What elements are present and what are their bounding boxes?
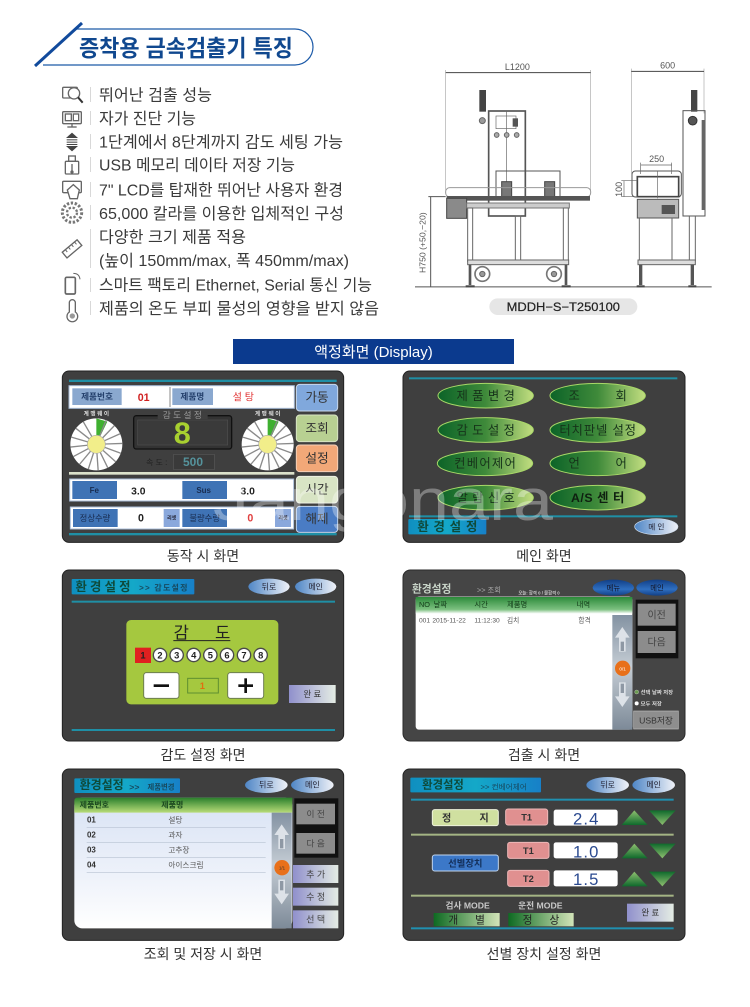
feature text: self diagnosis: 자가 진단 기능 — [99, 110, 196, 128]
log table: 날짜 — [434, 600, 447, 609]
list dividers — [90, 87, 92, 315]
header tag: 환 경 설 정 — [417, 520, 477, 534]
count row: 정상수량 — [80, 513, 111, 523]
caption: sensitivity: 감도 설정 화면 — [160, 747, 246, 763]
caption: main: 메인 화면 — [516, 548, 572, 564]
product table: 04 — [87, 861, 96, 870]
product table: 아이스크림 — [168, 860, 204, 870]
count row: 0 — [138, 513, 144, 525]
menu buttons: A/S 센 터 — [571, 491, 624, 505]
sensitivity card — [126, 620, 278, 704]
sensitivity card: 3 — [174, 650, 179, 660]
technical drawing — [415, 61, 712, 315]
count row: 0 — [247, 513, 253, 525]
sensitivity card: 1 — [140, 651, 146, 661]
mode selectors: 정 상 — [523, 914, 560, 926]
sorter label — [432, 855, 498, 871]
sensitivity card: 1 — [200, 681, 205, 691]
product table: 1/1 — [279, 865, 286, 870]
product table: 설탕 — [168, 815, 182, 825]
sensitivity card: 7 — [241, 650, 247, 660]
feature text: sensitivity: 1단계에서 8단계까지 감도 세팅 가능 — [99, 134, 343, 152]
page buttons: 이 전 — [306, 809, 325, 819]
panel: product list — [62, 769, 344, 940]
nav buttons: 메인 — [305, 780, 320, 790]
product info row — [69, 386, 294, 408]
T2 row: T2 — [523, 874, 534, 884]
icon: USB drive — [65, 156, 79, 174]
log table: 합격 — [578, 615, 591, 624]
side buttons: 조회 — [305, 421, 329, 435]
log table: 11:12:30 — [474, 617, 500, 624]
page buttons: 이전 — [647, 609, 666, 621]
right dial: 계 맹 웨 이 — [255, 410, 280, 418]
stop row: 정 지 — [442, 813, 489, 825]
feature text: LCD: 7" LCD를 탑재한 뛰어난 사용자 환경 — [99, 182, 343, 200]
header tag: 제품변경 — [148, 783, 174, 792]
product table: 03 — [87, 846, 96, 855]
ground line — [415, 285, 712, 288]
section title — [35, 23, 313, 66]
menu buttons: 조 회 — [568, 389, 627, 403]
feature text: detection: 뛰어난 검출 성능 — [99, 86, 212, 104]
model label: MDDH−S−T250100 — [507, 300, 620, 314]
header tag — [74, 778, 180, 793]
log table — [416, 597, 632, 730]
menu buttons: 감 도 설 정 — [456, 423, 515, 437]
count row: 불량수량 — [189, 513, 220, 523]
speed — [146, 454, 214, 470]
speed: 속 도 : — [146, 458, 167, 467]
icon: thermometer — [67, 300, 78, 322]
header tag: 환 경 설 정 — [75, 580, 130, 594]
Fe and Sus row: Fe — [90, 486, 100, 495]
page buttons — [636, 600, 678, 658]
header tag: 환경설정 — [80, 778, 124, 792]
panel: operation screen — [62, 371, 344, 542]
nav buttons — [248, 579, 336, 595]
T2 row: 1.5 — [573, 870, 598, 889]
page buttons — [294, 798, 338, 858]
log table: 2015-11-22 — [432, 617, 466, 624]
icon: smartphone wireless — [65, 273, 80, 294]
done button: 완 료 — [304, 689, 321, 699]
main button — [635, 519, 678, 535]
front view — [417, 62, 591, 287]
feature text: USB: USB 메모리 데이타 저장 기능 — [99, 156, 295, 174]
header tag — [72, 579, 194, 594]
page buttons: 다음 — [647, 637, 666, 649]
side buttons: 가동 — [305, 391, 329, 405]
sensitivity card: 8 — [258, 650, 263, 660]
stop row: T1 — [521, 813, 532, 823]
log table: NO — [419, 600, 430, 609]
Fe and Sus row: 3.0 — [240, 486, 255, 497]
panel: main screen — [403, 371, 685, 542]
nav buttons: 뒤로 — [600, 781, 615, 790]
Fe and Sus row — [70, 479, 294, 501]
mode selectors: 운전 MODE — [518, 900, 563, 911]
nav buttons — [586, 777, 675, 793]
nav buttons: 메인 — [646, 780, 661, 790]
Fe and Sus row: Sus — [196, 486, 212, 495]
panel: inspection log — [403, 570, 685, 741]
count row: 리셋 — [167, 515, 177, 522]
side view: 250 — [649, 154, 664, 164]
speed: 500 — [183, 455, 203, 469]
caption: sorter: 선별 장치 설정 화면 — [487, 946, 601, 962]
USB save button: USB저장 — [639, 716, 673, 726]
action buttons: 추 가 — [306, 869, 325, 879]
front view: H750 (+50,−20) — [417, 212, 427, 273]
menu buttons: 터치판넬 설정 — [559, 423, 636, 437]
done button — [289, 685, 336, 703]
icon: touch screen — [63, 181, 81, 199]
feature text: sizes: 다양한 크기 제품 적용 — [99, 228, 246, 246]
T1 row: T1 — [523, 846, 534, 856]
section title: 증착용 금속검출기 특징 — [79, 35, 293, 61]
Fe and Sus row: 3.0 — [131, 486, 146, 497]
sensitivity card: 2 — [157, 650, 163, 660]
sensitivity card: 감 도 — [174, 624, 230, 643]
mode selectors: 검사 MODE — [446, 900, 490, 911]
sensitivity readout: 감 도 설 정 — [163, 409, 202, 420]
nav buttons: 메뉴 — [607, 583, 620, 592]
screen header: >> 조회 — [477, 585, 501, 594]
side view: 100 — [614, 182, 624, 197]
side buttons: 설정 — [305, 451, 329, 465]
panel: sorter settings — [403, 769, 685, 940]
T1 row: 1.0 — [573, 842, 598, 861]
feature text: ethernet: 스마트 팩토리 Ethernet, Serial 통신 기능 — [99, 276, 372, 294]
right dial — [242, 410, 294, 470]
product table: 제품번호 — [80, 799, 110, 809]
menu buttons: 제 품 변 경 — [456, 389, 515, 403]
left dial: 계 맹 웨 이 — [84, 410, 109, 418]
product info row: 설 탕 — [233, 391, 254, 403]
header tag — [410, 777, 541, 792]
feature text: colors: 65,000 칼라를 이용한 입체적인 구성 — [99, 205, 344, 223]
caption: list: 조회 및 저장 시 화면 — [144, 946, 262, 962]
done button: 완 료 — [642, 908, 659, 918]
icon: magnifier — [63, 87, 83, 103]
left dial — [70, 410, 122, 470]
nav buttons — [593, 580, 678, 596]
side view: 600 — [660, 61, 675, 71]
nav buttons — [245, 777, 334, 793]
menu buttons — [437, 383, 645, 510]
product table: 과자 — [168, 831, 182, 840]
log table: 0/1 — [619, 666, 626, 671]
banner: display — [233, 339, 514, 364]
side buttons — [296, 384, 338, 532]
done button — [627, 904, 674, 922]
stop row — [432, 809, 676, 828]
screen header: 오늘: 합격 0 / 불합격 0 — [518, 590, 560, 597]
menu buttons: 컨베어제어 — [454, 457, 516, 471]
log table: 내역 — [577, 600, 590, 609]
nav buttons: 뒤로 — [259, 781, 274, 790]
sensitivity card: 6 — [224, 650, 230, 660]
log table: 김치 — [507, 615, 519, 624]
caption: operation: 동작 시 화면 — [167, 548, 239, 564]
USB save button — [634, 711, 678, 729]
product info row: 01 — [138, 392, 150, 404]
model label — [489, 298, 637, 315]
icon: color wheel — [62, 203, 82, 222]
side buttons: 해제 — [305, 512, 329, 526]
icon: up down arrows — [66, 133, 78, 151]
log table: 001 — [419, 617, 430, 624]
product table: 01 — [87, 816, 96, 825]
count row — [70, 507, 294, 529]
feature text: temperature: 제품의 온도 부피 물성의 영향을 받지 않음 — [99, 300, 379, 318]
sensitivity readout: 8 — [174, 417, 191, 451]
page buttons: 다 음 — [306, 838, 325, 848]
captions — [144, 548, 601, 962]
screen header — [412, 582, 560, 597]
screen header: 환경설정 — [412, 582, 451, 595]
front view: L1200 — [505, 62, 530, 72]
save options: 모두 저장 — [641, 699, 662, 707]
action buttons: 수 정 — [306, 892, 325, 902]
save options: 선택 날짜 저장 — [641, 688, 673, 696]
stop row: 2.4 — [573, 809, 598, 828]
side view — [614, 61, 705, 286]
sensitivity readout — [134, 409, 232, 451]
header tag: >> — [129, 782, 139, 792]
count row: 리셋 — [278, 515, 288, 522]
nav buttons: 메인 — [308, 581, 323, 591]
main button: 메 인 — [648, 521, 664, 531]
feature icons — [62, 87, 83, 322]
watermark: Jangonara — [213, 468, 554, 533]
panel: sensitivity setting — [62, 570, 344, 741]
feature list — [99, 86, 379, 318]
log table: 제품명 — [507, 600, 527, 609]
action buttons: 선 택 — [306, 915, 325, 925]
product info row: 제품명 — [180, 391, 204, 402]
T1 row — [508, 842, 676, 861]
nav buttons: 메인 — [650, 583, 664, 592]
sensitivity card: 4 — [191, 650, 197, 660]
product table: 고추장 — [168, 845, 189, 855]
icon: monitor check — [63, 112, 81, 127]
menu buttons: 언 어 — [568, 457, 627, 471]
save options — [635, 688, 673, 707]
caption: inspection: 검출 시 화면 — [508, 747, 580, 763]
log table: 시간 — [474, 600, 488, 609]
icon: ruler — [62, 240, 82, 258]
product table: 제품명 — [161, 799, 183, 809]
nav buttons: 뒤로 — [262, 582, 276, 591]
sensitivity card: 5 — [208, 650, 213, 660]
feature text: size limits: (높이 150mm/max, 폭 450mm/max) — [99, 252, 349, 270]
mode selectors — [434, 900, 574, 926]
header tag: 환경설정 — [422, 777, 464, 791]
T2 row — [508, 870, 676, 889]
product table: 02 — [87, 831, 96, 840]
header tag: >> 컨베어제어 — [481, 782, 527, 792]
header tag: >> 감도설정 — [139, 582, 187, 592]
mode selectors: 개 별 — [448, 914, 485, 926]
product table — [74, 798, 292, 928]
product info row: 제품번호 — [81, 391, 113, 402]
banner: display: 액정화면 (Display) — [314, 344, 433, 361]
action buttons — [293, 865, 338, 928]
sorter label: 선별장치 — [448, 857, 482, 868]
side buttons: 시간 — [305, 483, 329, 497]
menu buttons: 알 람 신 호 — [456, 491, 515, 505]
